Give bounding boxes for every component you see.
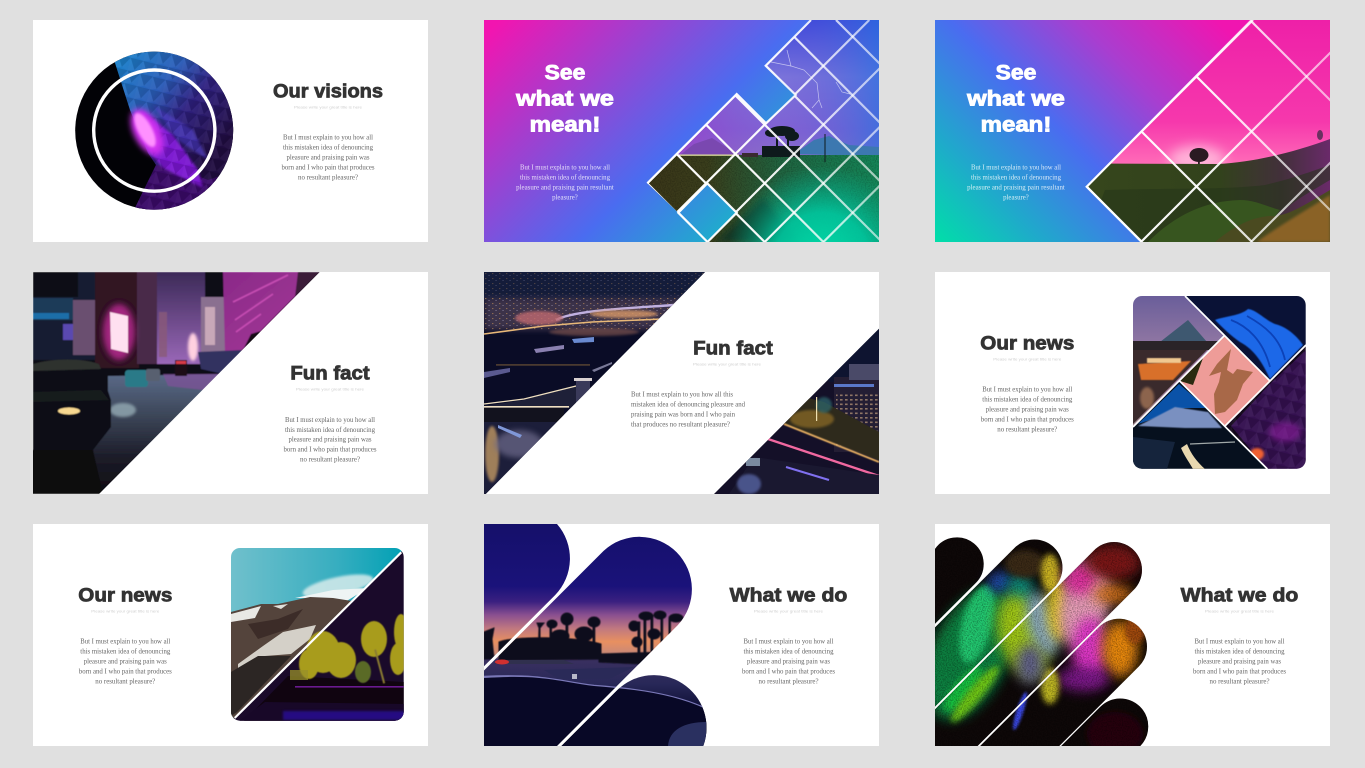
- white ring: [94, 70, 215, 191]
- body text: [1193, 638, 1286, 685]
- diagonal photo: riverside buildings: [714, 328, 879, 494]
- panel: Our news, mosaic: [935, 272, 1330, 494]
- body text: [516, 164, 614, 202]
- body text: no resultant pleasure?: [1210, 677, 1270, 685]
- subtitle: Please write your great title is here: [296, 388, 364, 392]
- body text: this mistaken idea of denouncing: [520, 174, 610, 182]
- body text: no resultant pleasure?: [300, 455, 360, 463]
- body text: this mistaken idea of denouncing: [80, 648, 171, 656]
- subtitle: Please write your great title is here: [754, 610, 823, 614]
- subtitle: Please write your great title is here: [294, 106, 362, 110]
- body text: born and I who pain that produces: [1193, 667, 1286, 675]
- body text: But I must explain to you how all this: [631, 391, 733, 399]
- panel: See what we mean, pink to green gradient: [484, 20, 879, 242]
- body text: But I must explain to you how all: [285, 416, 375, 424]
- rounded stripes photo: spectrum on textured glass: [935, 537, 1148, 746]
- heading: [966, 61, 1065, 137]
- photo: starry night with yellow trees: [231, 548, 408, 722]
- body text: But I must explain to you how all: [971, 164, 1061, 172]
- mosaic dividers: [1133, 296, 1306, 469]
- body text: this mistaken idea of denouncing: [285, 426, 375, 434]
- diagonal divider: [235, 552, 401, 718]
- mosaic piece: blue ruffle: [1185, 296, 1306, 381]
- body text: praising pain was born and I who pain: [631, 410, 735, 418]
- body text: that produces no resultant pleasure?: [631, 420, 730, 428]
- body text: this mistaken idea of denouncing: [744, 648, 834, 656]
- body text: [981, 386, 1074, 433]
- body text: pleasure and praising pain was: [1198, 657, 1281, 665]
- mosaic piece: pyramid at dusk: [1133, 296, 1224, 427]
- body text: no resultant pleasure?: [758, 677, 818, 685]
- split photo in rounded square: [231, 548, 408, 722]
- body text: pleasure and praising pain was: [286, 153, 370, 161]
- circular photo: faceted dome: [73, 50, 238, 212]
- mosaic piece: purple dome: [1225, 345, 1306, 469]
- body text: But I must explain to you how all: [1194, 638, 1285, 646]
- heading: what we: [515, 88, 614, 111]
- heading: what we: [966, 88, 1065, 111]
- heading: What we do: [730, 584, 847, 606]
- diamond outline: [1087, 20, 1252, 242]
- panel: Our visions slide: [33, 20, 428, 242]
- heading: See: [996, 61, 1036, 84]
- heading: Fun fact: [290, 362, 370, 384]
- panel: What we do, palm trees: [484, 524, 879, 746]
- rounded stripes photo: palm sunset: [484, 524, 714, 746]
- body text: born and I who pain that produces: [282, 163, 375, 171]
- heading: Fun fact: [693, 337, 773, 359]
- subtitle: Please write your great title is here: [693, 363, 761, 367]
- body text: [284, 416, 377, 463]
- heading: mean!: [981, 114, 1051, 137]
- body text: But I must explain to you how all: [982, 386, 1072, 394]
- heading: Our news: [980, 332, 1074, 354]
- body text: mistaken idea of denouncing pleasure and: [631, 400, 745, 408]
- subtitle: Please write your great title is here: [1205, 610, 1274, 614]
- body text: pleasure and praising pain resultant: [967, 184, 1065, 192]
- body text: born and I who pain that produces: [284, 446, 377, 454]
- body text: this mistaken idea of denouncing: [283, 144, 373, 152]
- body text: [282, 134, 375, 181]
- body text: no resultant pleasure?: [298, 173, 358, 181]
- heading: Our news: [78, 584, 172, 606]
- panel: See what we mean, green to pink gradient: [935, 20, 1330, 242]
- diamond outline: [647, 20, 811, 242]
- body text: But I must explain to you how all: [283, 134, 373, 142]
- body text: pleasure and praising pain was: [84, 657, 167, 665]
- body text: born and I who pain that produces: [981, 415, 1074, 423]
- photo: snowy mountain and sky: [231, 548, 405, 722]
- body text: pleasure and praising pain was: [986, 405, 1069, 413]
- heading: Our visions: [273, 80, 383, 102]
- panel: What we do, colored lights: [935, 524, 1330, 746]
- panel: Fun fact, night river: [484, 272, 879, 494]
- heading: mean!: [530, 114, 600, 137]
- body text: [967, 164, 1065, 202]
- subtitle: Please write your great title is here: [91, 610, 159, 614]
- panel: Our news, split photo: [33, 524, 428, 746]
- mosaic piece: leaf on pink: [1179, 336, 1270, 426]
- body text: pleasure?: [552, 194, 578, 202]
- body text: But I must explain to you how all: [80, 638, 170, 646]
- body text: [631, 391, 745, 428]
- body text: [79, 638, 172, 685]
- diagonal photo: snowy neon street: [31, 272, 323, 494]
- diagonal photo: bridge at night: [484, 272, 709, 494]
- heading: What we do: [1181, 584, 1298, 606]
- body text: pleasure and praising pain resultant: [516, 184, 614, 192]
- body text: this mistaken idea of denouncing: [1194, 648, 1285, 656]
- panel: Fun fact, city street: [33, 272, 428, 494]
- body text: pleasure?: [1003, 194, 1029, 202]
- body text: born and I who pain that produces: [742, 667, 835, 675]
- heading: See: [545, 61, 585, 84]
- diamond grid photo: hill and tree: [1088, 20, 1330, 242]
- body text: no resultant pleasure?: [997, 425, 1057, 433]
- body text: pleasure and praising pain was: [747, 657, 830, 665]
- mosaic piece: mountain road: [1133, 381, 1267, 469]
- subtitle: Please write your great title is here: [993, 358, 1061, 362]
- body text: born and I who pain that produces: [79, 667, 172, 675]
- body text: pleasure and praising pain was: [288, 436, 372, 444]
- body text: But I must explain to you how all: [520, 164, 610, 172]
- photo mosaic in rounded square: [1133, 296, 1306, 469]
- heading: [515, 61, 614, 137]
- body text: this mistaken idea of denouncing: [971, 174, 1061, 182]
- body text: But I must explain to you how all: [744, 638, 834, 646]
- body text: [742, 638, 835, 685]
- diamond grid photo: field and palms: [647, 20, 879, 242]
- body text: this mistaken idea of denouncing: [982, 396, 1073, 404]
- body text: no resultant pleasure?: [95, 677, 155, 685]
